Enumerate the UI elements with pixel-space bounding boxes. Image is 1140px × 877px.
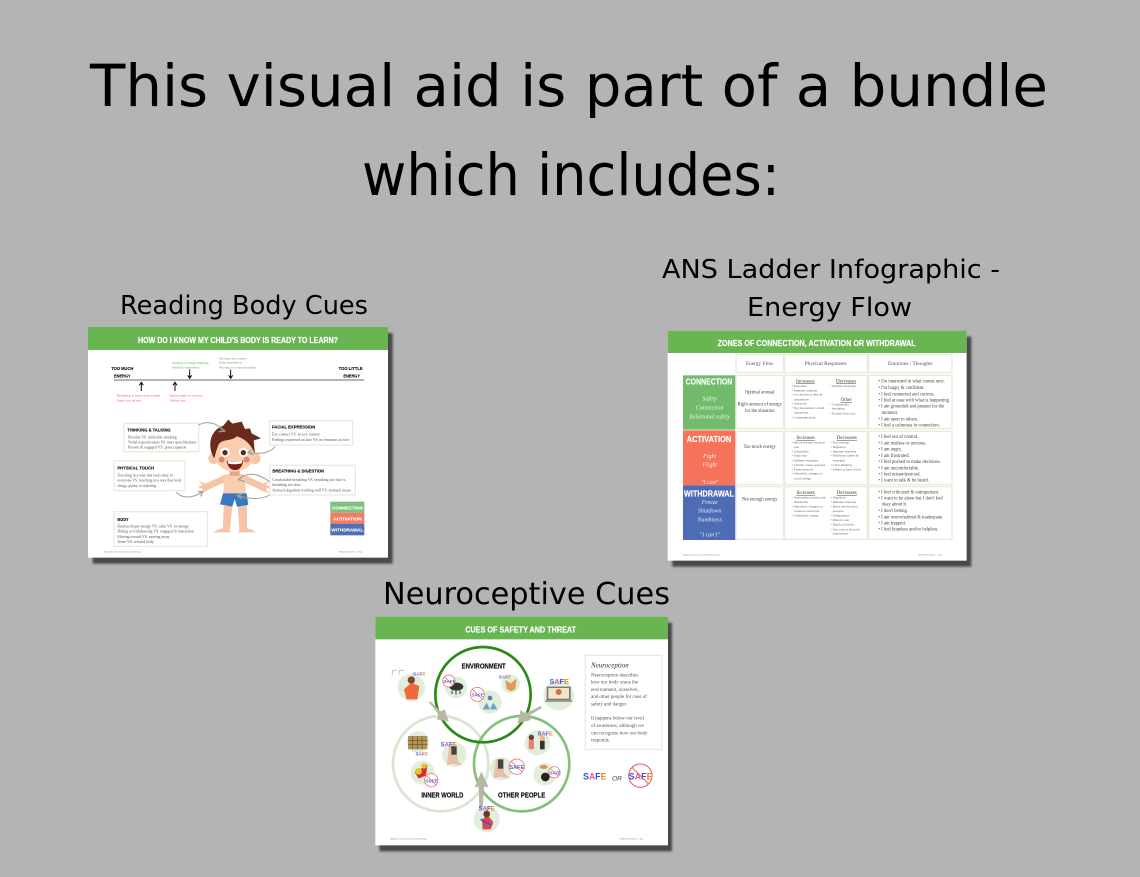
footer: Wellbeing Printables © - Etsy (918, 553, 942, 556)
card: physical touch: PHYSICAL TOUCH (117, 466, 155, 471)
card: breathing and digestion: breathing too slow (272, 483, 301, 487)
row: activation details: • Pupil size (792, 454, 808, 458)
zone: activation (683, 430, 735, 486)
venn diagram (393, 647, 569, 811)
safe labels: SAFE (538, 731, 553, 737)
row: connection details: • Communication (792, 415, 816, 419)
row: withdrawal details: Not enough energy (742, 498, 778, 503)
row: connection details: Right amount of energy (738, 403, 782, 408)
footer (390, 837, 643, 840)
row: activation details: • I am frustrated. (878, 454, 910, 459)
row: withdrawal details: • Heart rate & blood (831, 505, 858, 509)
row: withdrawal details: • Endorphins (raises pain (792, 496, 826, 500)
row: withdrawal details: Increases (796, 491, 815, 496)
crossed safe labels: SAFE (471, 692, 484, 697)
row: withdrawal details: • Digestion (831, 496, 846, 500)
zone: activation: Fight (702, 454, 716, 460)
callout: neuroception: It happens below our level (591, 717, 644, 722)
card: thinking and talking (124, 423, 199, 452)
row: activation details: • Fuel storage (831, 441, 850, 445)
callout: neuroception: can recognize how our body (591, 731, 648, 736)
footer (104, 550, 362, 553)
row: connection details: • Normal heart rate (830, 411, 856, 415)
energy timeline: Easy expression (219, 361, 242, 365)
row: connection details: • Defense strategies (830, 384, 857, 388)
row: withdrawal details: threshold) (794, 500, 807, 504)
card: physical touch (114, 461, 185, 491)
callout: neuroception: Neuroception (590, 662, 629, 670)
row: activation details: • Ability to hear voices (831, 467, 862, 471)
card: body: Restless/hyper energy VS. calm VS. no energy (117, 525, 189, 529)
zone: withdrawal (683, 485, 735, 540)
zone: activation: Flight (701, 463, 717, 469)
energy timeline: Breathing is faster than normal (117, 394, 160, 398)
card: breathing and digestion: BREATHING & DIGESTION (272, 469, 325, 474)
venn diagram: ENVIRONMENT (462, 664, 506, 671)
cues header: CUES OF SAFETY AND THREAT (465, 625, 576, 635)
heading: Neuroceptive Cues: Neuroceptive Cues (383, 577, 670, 612)
row: connection details: • I'm happy & confident. (878, 386, 924, 391)
table header row: Physical Responses (805, 361, 847, 367)
safe labels: SAFE (416, 752, 428, 757)
row: connection details: Decreases (836, 379, 856, 384)
card: breathing and digestion: Stomach digestion working well VS. stomach issues (272, 488, 351, 492)
row: activation details: Too much energy (743, 445, 777, 450)
arrows: connectors from cards to child (176, 423, 275, 499)
row: connection details: • I feel a calmness in connection. (878, 424, 940, 429)
footer: Adapted from Deb Dana and Stephen Porges (683, 553, 720, 556)
row: activation details: • Digestion (831, 445, 846, 449)
card: physical touch: Touching in a way that feels okay to (117, 474, 173, 478)
row: withdrawal details: • I feel hopeless and/or helpless. (878, 528, 938, 533)
row: withdrawal details: • Metabolic changes to (792, 505, 823, 509)
card: physical touch: everyone VS. touching in a way that feels (117, 479, 182, 483)
row: connection details: Optimal arousal (745, 390, 775, 395)
callout: neuroception (585, 655, 662, 749)
callout: neuroception: Neuroception describes (591, 673, 638, 678)
energy timeline: Moving to close proximity (219, 365, 257, 369)
footer (683, 553, 942, 556)
icon: cheerful child illustration (198, 420, 271, 532)
zone: connection: Safety (702, 396, 717, 403)
safe labels: SAFE (413, 671, 425, 676)
callout: neuroception: and other people for cues of (591, 695, 647, 700)
footer: Adapted from Deb Dana and Stephen Porges (390, 837, 427, 840)
zone: connection: Connection (696, 406, 723, 412)
row: activation details (736, 431, 952, 485)
row: connection details: extremities (794, 397, 809, 401)
row: withdrawal details: conserve resources (794, 509, 820, 513)
energy timeline: Verbally responsive (172, 365, 200, 369)
energy timeline: ENERGY (343, 373, 361, 378)
row: connection details: • I feel connected and curious. (878, 392, 935, 397)
row: activation details: • I am angry. (878, 448, 902, 453)
row: withdrawal details: • I don't belong. (878, 509, 908, 514)
card: facial expression: Eye contact VS. no eye contact (272, 433, 321, 437)
panel: cues of safety and threat (375, 617, 672, 851)
row: withdrawal details: expressions (833, 532, 849, 536)
title: which includes: (362, 141, 780, 209)
row: withdrawal details: • Depth of breath (831, 523, 854, 527)
row: connection details: • I'm interested in what comes next. (878, 380, 945, 385)
row: withdrawal details: • Muscle tone (831, 518, 850, 522)
card: body: Hiding or withdrawing VS. engaged in interaction (117, 530, 194, 534)
worksheet header (88, 327, 388, 350)
zone: connection: Relational safety (688, 413, 730, 420)
row: connection details: Increases (796, 379, 815, 384)
icons: small pictograms (392, 670, 572, 829)
crossed safe labels: SAFE (549, 770, 561, 775)
callout: neuroception: of awareness, although we (591, 724, 645, 729)
zone: activation: ACTIVATION (687, 434, 731, 444)
row: activation details: • I feel out of control. (878, 435, 919, 440)
card: thinking and talking: Present & engaged VS. preoccupation (128, 445, 186, 449)
table header row (736, 354, 952, 373)
energy timeline: Pupils are dilated (117, 398, 141, 402)
row: connection details: expression (794, 410, 809, 414)
table header row: Emotions / Thoughts (888, 361, 933, 367)
row: connection details: • Eye movement to hold (792, 406, 825, 410)
row: connection details: Other (841, 398, 852, 403)
card: thinking and talking: Verbal responsiveness VS. mere speechlessness (128, 440, 197, 444)
zone: withdrawal: Freeze (701, 500, 718, 506)
row: withdrawal details: • I am trapped. (878, 521, 906, 526)
row: activation details: • Blood pressure & heart (792, 441, 825, 445)
card: breathing and digestion: Comfortable breathing VS. breathing too fast vs. (272, 478, 346, 482)
zone: withdrawal: Numbness (696, 518, 723, 524)
crossed safe labels: SAFE (509, 765, 525, 771)
zone: withdrawal: "I can't" (700, 533, 720, 539)
callout: neuroception: environment, ourselves, (591, 688, 639, 693)
safe labels (413, 671, 569, 813)
legend: safe or not safe: OR (612, 776, 622, 783)
footer: Wellbeing Printables © - Etsy (339, 550, 362, 553)
legend: safe or not safe (583, 764, 653, 787)
row: activation details: • I feel pushed to make decisions. (878, 460, 941, 465)
card: thinking and talking: THINKING & TALKING (127, 427, 171, 432)
legend: zones: WITHDRAWAL (331, 528, 363, 534)
row: connection details: • Oxytocin (792, 402, 807, 406)
legend: safe or not safe: SAFE (629, 772, 653, 782)
row: activation details: Decreases (837, 436, 857, 441)
callout: neuroception: responds. (591, 739, 610, 744)
safe labels: SAFE (479, 807, 495, 813)
cues header (375, 617, 668, 639)
row: connection details: • Immune response (792, 388, 818, 392)
footer: Wellbeing Printables © - Etsy (620, 837, 643, 840)
energy timeline: Moving eye contact (219, 356, 247, 360)
row: connection details: • I am open to others. (878, 417, 918, 422)
row: connection details (736, 375, 952, 429)
row: withdrawal details: • Immune response (831, 500, 857, 504)
row: activation details: • Clear thinking (831, 463, 852, 467)
legend: zones (330, 502, 364, 535)
callout: neuroception: how our body scans the (591, 681, 639, 686)
row: withdrawal details: • I want to be alone but I don't feel (878, 497, 943, 502)
row: connection details: • I feel at ease with what is happening. (878, 399, 950, 404)
row: activation details: • I feel misunderstood. (878, 473, 921, 478)
legend: safe or not safe: SAFE (583, 772, 606, 782)
row: activation details: • Chronic stress response (792, 463, 826, 467)
venn diagram: INNER WORLD (421, 792, 463, 799)
row: connection details: for the situation (745, 409, 775, 414)
zones header (668, 331, 967, 353)
panel: zones of connection, activation or withdrawal (668, 331, 971, 567)
row: activation details: • Defense strategies (792, 458, 819, 462)
zone: connection (683, 375, 735, 430)
card: breathing and digestion (270, 465, 355, 495)
card: body (114, 512, 207, 546)
row: activation details: Increases (796, 436, 815, 441)
heading: ANS Ladder Infographic - Energy Flow: ANS Ladder Infographic - (662, 255, 1000, 285)
row: activation details: • Tense muscles (792, 467, 814, 471)
row: activation details: • I am restless or anxious. (878, 441, 926, 446)
card: body: BODY (117, 517, 129, 522)
zone: withdrawal: Shutdown (698, 509, 721, 515)
heading: ANS Ladder Infographic - Energy Flow (662, 255, 1000, 323)
safe labels: SAFE (549, 677, 569, 686)
card: facial expression: FACIAL EXPRESSION (272, 424, 316, 429)
table header row: Energy Flow (746, 361, 774, 367)
row: withdrawal details: • I am overwhelmed & inadequate. (878, 515, 943, 520)
row: activation details: avoid energy (794, 476, 812, 480)
icon circles (398, 674, 574, 832)
row: withdrawal details (736, 487, 952, 539)
legend: zones: CONNECTION (332, 505, 363, 511)
card: body: Tense VS. relaxed body (117, 540, 154, 544)
energy timeline: Talking fast (169, 398, 186, 402)
energy timeline: Senses begin to activate (169, 394, 203, 398)
venn diagram: OTHER PEOPLE (498, 792, 546, 799)
energy timeline (111, 356, 364, 402)
zone: activation: "I can" (701, 480, 719, 486)
row: activation details: • Relational safety & (831, 454, 859, 458)
row: connection details: breathing (832, 407, 845, 411)
card: thinking and talking: Flexible VS. inflexible thinking (128, 435, 177, 439)
row: connection details: • Circulation to skin & (792, 393, 823, 397)
worksheet header: HOW DO I KNOW MY CHILD'S BODY IS READY TO LEARN? (138, 335, 338, 345)
row: activation details: • I am uncomfortable. (878, 466, 919, 471)
row: withdrawal details: Decreases (837, 491, 857, 496)
energy timeline: ENERGY (114, 373, 131, 378)
safe labels: SAFE (441, 743, 457, 749)
crossed safe labels (425, 675, 561, 787)
title (89, 52, 1048, 209)
card: body: Moving toward VS. moving away (117, 535, 170, 539)
row: withdrawal details: • I feel criticized & unimportant. (878, 490, 939, 495)
arrows: into venn circles (429, 701, 542, 809)
row: connection details: • Digestion (792, 384, 807, 388)
footer: Adapted from Stephen Porges and Deb Dana (104, 550, 142, 553)
row: connection details: • Comfortable (830, 402, 849, 406)
heading: ANS Ladder Infographic - Energy Flow: Energy Flow (747, 293, 912, 323)
row: activation details: rate (794, 445, 800, 449)
row: activation details: strategies (833, 458, 846, 462)
callout: neuroception: safety and danger. (591, 702, 627, 707)
zones header: ZONES OF CONNECTION, ACTIVATION OR WITHDRAWAL (718, 338, 916, 348)
row: withdrawal details: • Vulnerable coping (792, 514, 819, 518)
row: connection details: moment. (882, 411, 898, 416)
energy timeline: Flexible to rough thinking (172, 361, 209, 365)
row: connection details: • I am grounded and present for the (878, 405, 944, 410)
card: facial expression: Feelings expressed on face VS. no emotions on face (272, 438, 350, 442)
row: withdrawal details: • Temperature (831, 514, 850, 518)
title: This visual aid is part of a bundle (89, 52, 1048, 120)
zone: connection: CONNECTION (686, 377, 732, 387)
row: activation details: • Adrenaline (792, 449, 809, 453)
row: activation details: • Immune response (831, 449, 857, 453)
card: facial expression (270, 421, 353, 445)
row: withdrawal details: okay about it. (882, 503, 907, 508)
row: withdrawal details: pressure (833, 509, 844, 513)
zone: withdrawal: WITHDRAWAL (684, 488, 735, 498)
crossed safe labels: SAFE (443, 679, 456, 684)
panel: reading body cues worksheet (88, 327, 393, 564)
row: activation details: • I want to talk & be heard. (878, 479, 929, 484)
card: physical touch: clingy, pushy or rejecting (117, 484, 156, 489)
safe labels: SAFE (499, 675, 511, 680)
energy timeline: TOO MUCH (111, 366, 134, 371)
energy timeline: TOO LITTLE (339, 366, 363, 371)
crossed safe labels: SAFE (425, 778, 438, 783)
legend: zones: ACTIVATION (333, 516, 362, 522)
row: withdrawal details: • Eye contact & facial (831, 527, 860, 531)
heading: Reading Body Cues: Reading Body Cues (120, 291, 368, 321)
row: activation details: • Metabolic changes to (792, 472, 823, 476)
